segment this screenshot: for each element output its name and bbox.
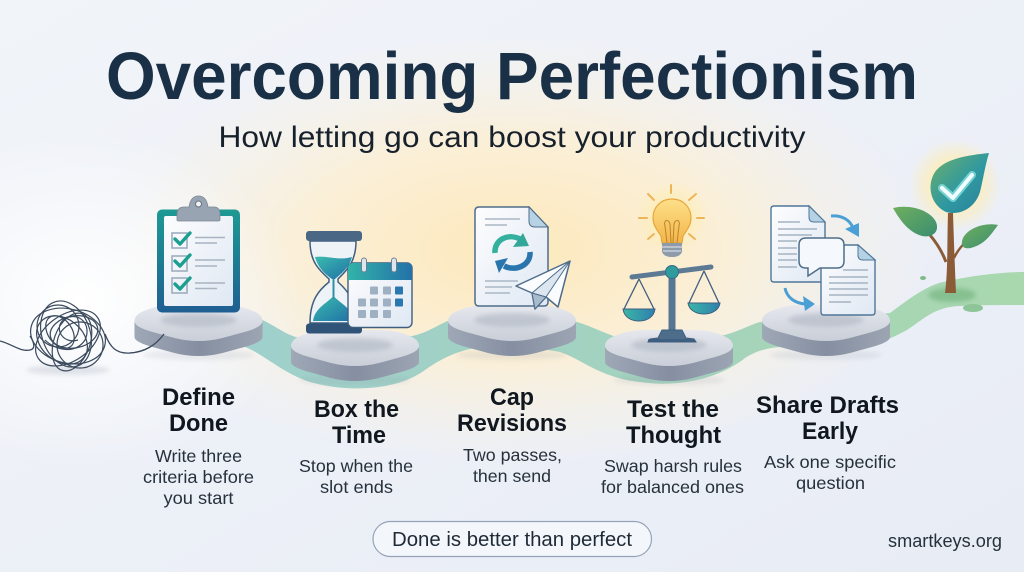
step 5 text [756, 392, 899, 493]
step 5 text: Ask one specific [764, 452, 896, 472]
step 2 text: Time [332, 422, 386, 449]
step 1 text [143, 384, 254, 508]
step 3 text: Revisions [457, 410, 567, 437]
step 1 text: you start [164, 488, 234, 508]
winding path ribbon [240, 272, 1024, 388]
step 1 text: criteria before [143, 467, 254, 487]
step 4 text: Swap harsh rules [604, 456, 742, 476]
website credit: smartkeys.org [888, 531, 1002, 551]
step 1 text: Done [169, 410, 228, 437]
subtitle: How letting go can boost your productivity [218, 121, 806, 154]
icon: balance scale [623, 266, 720, 342]
step 5 text: Early [802, 418, 859, 445]
step 2 text [299, 396, 413, 497]
step 5 text: question [796, 473, 865, 493]
platform 5 [762, 305, 890, 360]
step 5 text: Share Drafts [756, 392, 899, 419]
step 3 text: Cap [490, 384, 534, 411]
platform 2 [291, 330, 419, 385]
icon: revision document with paper plane [475, 207, 570, 309]
step 4 text: Thought [626, 422, 721, 449]
step 3 text [457, 384, 567, 486]
icon: clipboard checklist [157, 196, 240, 312]
icon: calendar [348, 258, 412, 328]
step 4 text: Test the [627, 396, 719, 423]
icon: sprout with check leaf [893, 139, 1001, 312]
icon: shared documents with speech bubble [771, 206, 875, 315]
step 3 text: then send [473, 466, 551, 486]
step 4 text: for balanced ones [601, 477, 744, 497]
icon: tangled thread [0, 294, 164, 377]
callout pill [373, 522, 652, 556]
thread end on platform [130, 334, 164, 353]
step 2 text: slot ends [320, 477, 393, 497]
step 3 text: Two passes, [463, 445, 562, 465]
callout pill: Done is better than perfect [392, 529, 632, 551]
step 1 text: Write three [155, 446, 242, 466]
step 4 text [601, 396, 744, 497]
platform 1 [134, 305, 262, 360]
icon: light bulb [636, 182, 708, 257]
step 2 text: Stop when the [299, 456, 413, 476]
step 2 text: Box the [314, 396, 399, 423]
platform 4 [605, 330, 733, 385]
step 1 text: Define [162, 384, 235, 411]
platform 3 [448, 305, 576, 360]
icon: hourglass [306, 231, 362, 334]
title: Overcoming Perfectionism [106, 39, 918, 114]
